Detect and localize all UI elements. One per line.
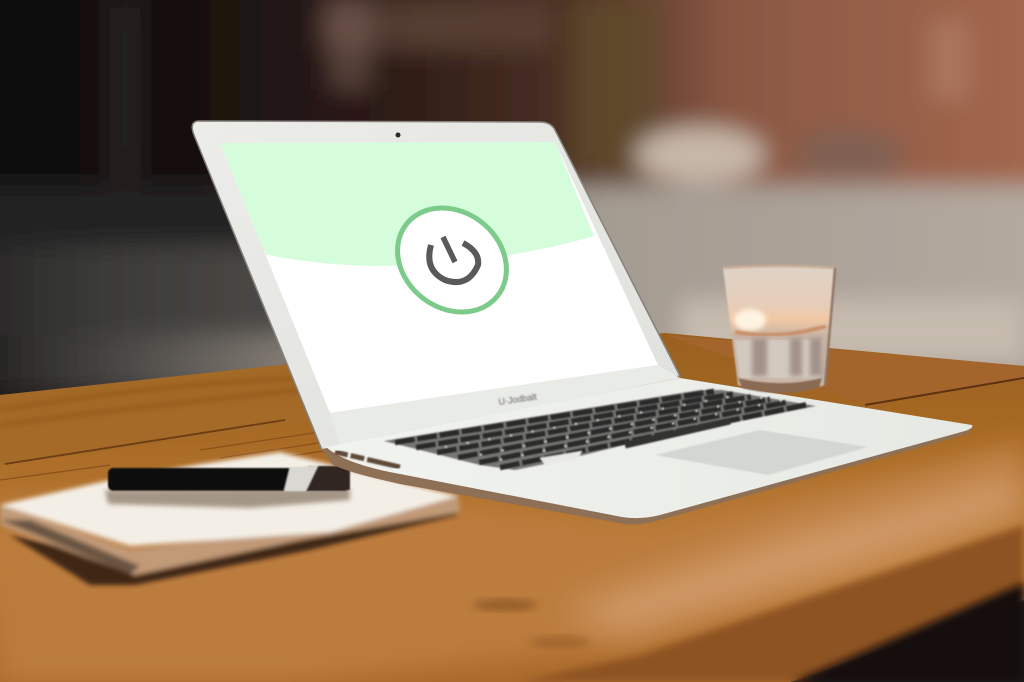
glass of water: [723, 266, 835, 393]
camera: [396, 132, 400, 138]
table front highlight and edge: [0, 440, 1024, 682]
lower bezel: [330, 365, 680, 446]
laptop base: [322, 378, 973, 524]
trackpad: [655, 430, 868, 475]
laptop: [192, 121, 973, 524]
green header: [220, 142, 594, 266]
screen: [220, 142, 658, 413]
laptop lid: [192, 121, 680, 450]
notebook: [0, 452, 460, 585]
power button: [377, 186, 527, 334]
wooden table: [0, 333, 1024, 682]
keyboard: [384, 390, 816, 470]
logo text: U·Jodbalt: [498, 392, 538, 407]
phone: [105, 466, 350, 508]
